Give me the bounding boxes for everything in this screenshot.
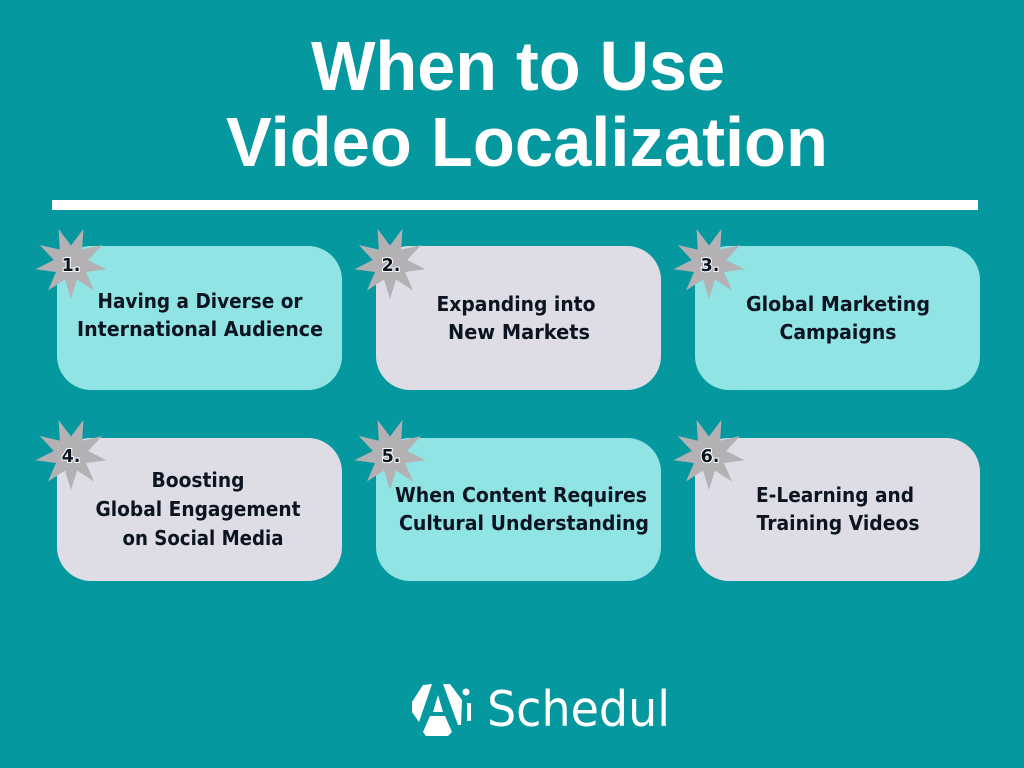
panel: card 3 xyxy=(674,229,980,390)
text: card 1: Having a Diverse or xyxy=(98,289,303,313)
text: card 5: When Content Requires xyxy=(395,483,647,507)
icon: star badge 4 xyxy=(36,420,106,490)
text: card 1: International Audience xyxy=(77,317,323,341)
number 2: 2. xyxy=(382,256,400,276)
text: card 4: on Social Media xyxy=(122,526,284,550)
number 5: 5. xyxy=(382,447,400,467)
number 4: 4. xyxy=(62,447,80,467)
text: card 2: New Markets xyxy=(448,320,590,344)
text: card 4: Boosting xyxy=(152,468,244,492)
title xyxy=(226,27,828,181)
text: card 6: Training Videos xyxy=(756,511,920,535)
logo: Ai Schedul xyxy=(412,681,670,738)
text: card 3: Campaigns xyxy=(780,320,896,344)
text: card 2: Expanding into xyxy=(436,292,596,316)
number 6: 6. xyxy=(701,447,719,467)
text: card 4: Global Engagement xyxy=(96,497,301,521)
icon: star badge 6 xyxy=(674,420,744,490)
panel: card 5 xyxy=(354,420,661,581)
icon: star badge 1 xyxy=(36,229,106,299)
text: card 5: Cultural Understanding xyxy=(399,511,649,535)
text: card 3: Global Marketing xyxy=(746,292,930,316)
panel: card 2 xyxy=(354,229,661,390)
panel: card 1 xyxy=(36,229,342,390)
icon: star badge 2 xyxy=(354,229,426,299)
panel: card 6 xyxy=(674,420,980,581)
icon: star badge 3 xyxy=(674,229,744,299)
title: When to Use xyxy=(311,27,725,105)
icon: star badge 5 xyxy=(354,420,426,490)
number 3: 3. xyxy=(701,256,719,276)
panel: card 4 xyxy=(36,420,342,581)
wordmark: Schedul xyxy=(487,681,670,738)
number 1: 1. xyxy=(62,256,80,276)
icon: logo mark xyxy=(412,684,471,736)
title: Video Localization xyxy=(226,103,828,181)
text: card 6: E-Learning and xyxy=(756,483,914,507)
